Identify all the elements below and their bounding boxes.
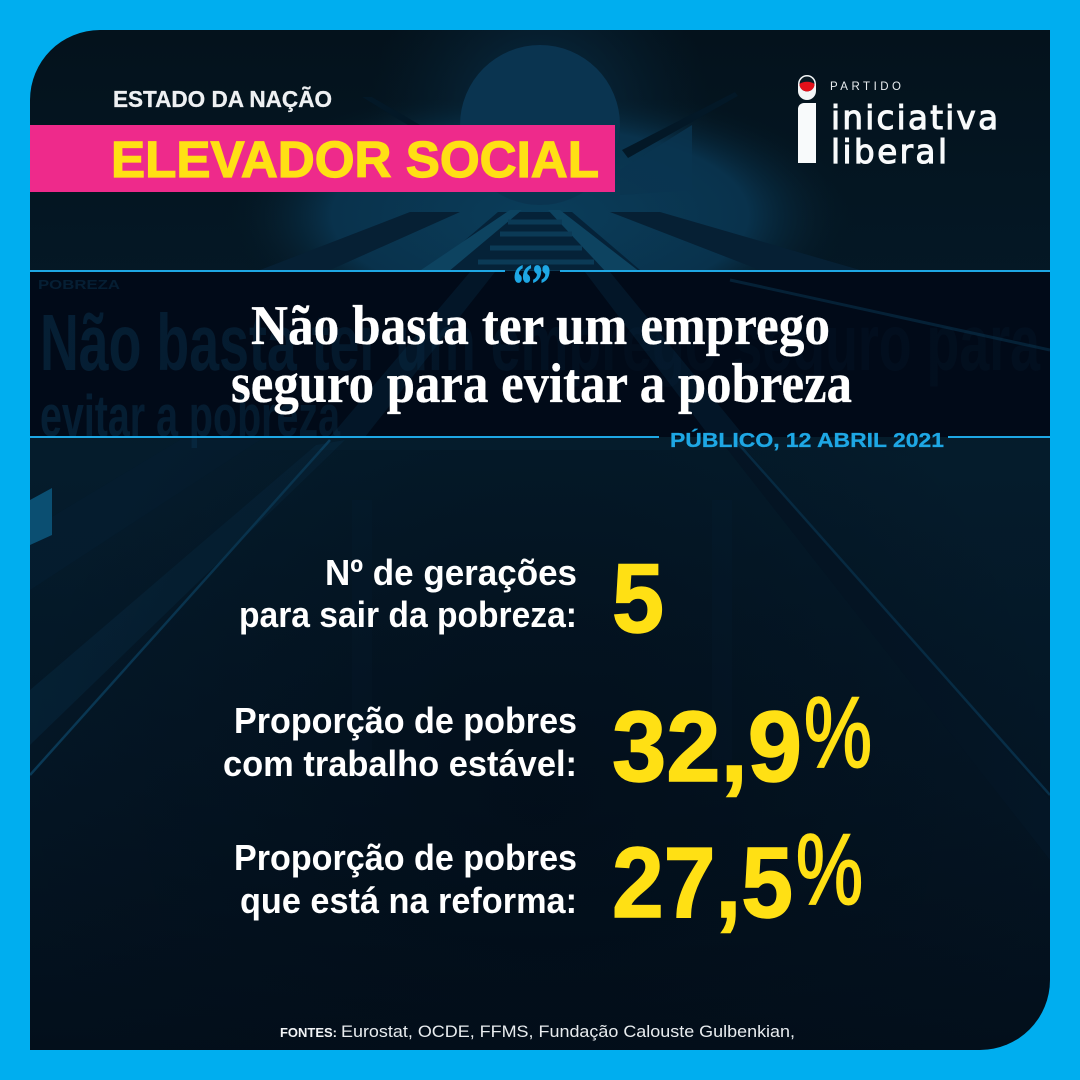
quote band bbox=[30, 271, 1050, 449]
ghost background text: evitar a pobreza bbox=[40, 384, 340, 449]
stat: generations: Nº de gerações bbox=[325, 552, 577, 593]
title banner: ELEVADOR SOCIAL bbox=[111, 131, 599, 188]
section label: ESTADO DA NAÇÃO bbox=[113, 85, 332, 112]
stat: generations bbox=[239, 543, 664, 653]
stat: stable work bbox=[223, 677, 872, 803]
stat: stable work: com trabalho estável: bbox=[223, 743, 577, 784]
stat: stable work: % bbox=[804, 677, 872, 789]
stat: retired bbox=[234, 814, 863, 939]
ghost background text bbox=[39, 280, 576, 448]
quote headline bbox=[231, 295, 852, 415]
escalator lower bbox=[30, 439, 1050, 796]
stat: generations: 5 bbox=[612, 543, 664, 653]
divider top with quote mark: “” bbox=[513, 254, 551, 316]
stat: retired: 27,5 bbox=[612, 827, 793, 939]
stat: generations: para sair da pobreza: bbox=[239, 594, 577, 635]
sources footer: Eurostat, OCDE, FFMS, Fundação Calouste Gulbenkian, bbox=[341, 1022, 795, 1041]
quote headline: seguro para evitar a pobreza bbox=[231, 353, 852, 415]
stat: retired: que está na reforma: bbox=[240, 880, 577, 921]
tunnel bbox=[362, 45, 738, 205]
logo: Iniciativa Liberal: liberal bbox=[831, 133, 947, 171]
logo: Iniciativa Liberal: iniciativa bbox=[831, 99, 998, 137]
stat: stable work: Proporção de pobres bbox=[234, 700, 577, 741]
logo: Iniciativa Liberal bbox=[798, 75, 998, 171]
divider bottom with source: PÚBLICO, 12 ABRIL 2021 bbox=[670, 428, 944, 452]
sources footer: FONTES: bbox=[280, 1025, 337, 1040]
icon: logo i bbox=[798, 75, 816, 163]
escalator rails upper bbox=[260, 210, 860, 272]
stat: retired: % bbox=[796, 814, 863, 926]
stat: retired: Proporção de pobres bbox=[234, 837, 577, 878]
quote headline: Não basta ter um emprego bbox=[251, 295, 830, 357]
logo: Iniciativa Liberal: PARTIDO bbox=[830, 81, 901, 93]
stat: stable work: 32,9 bbox=[612, 691, 802, 803]
ghost background text: POBREZA bbox=[38, 277, 121, 292]
